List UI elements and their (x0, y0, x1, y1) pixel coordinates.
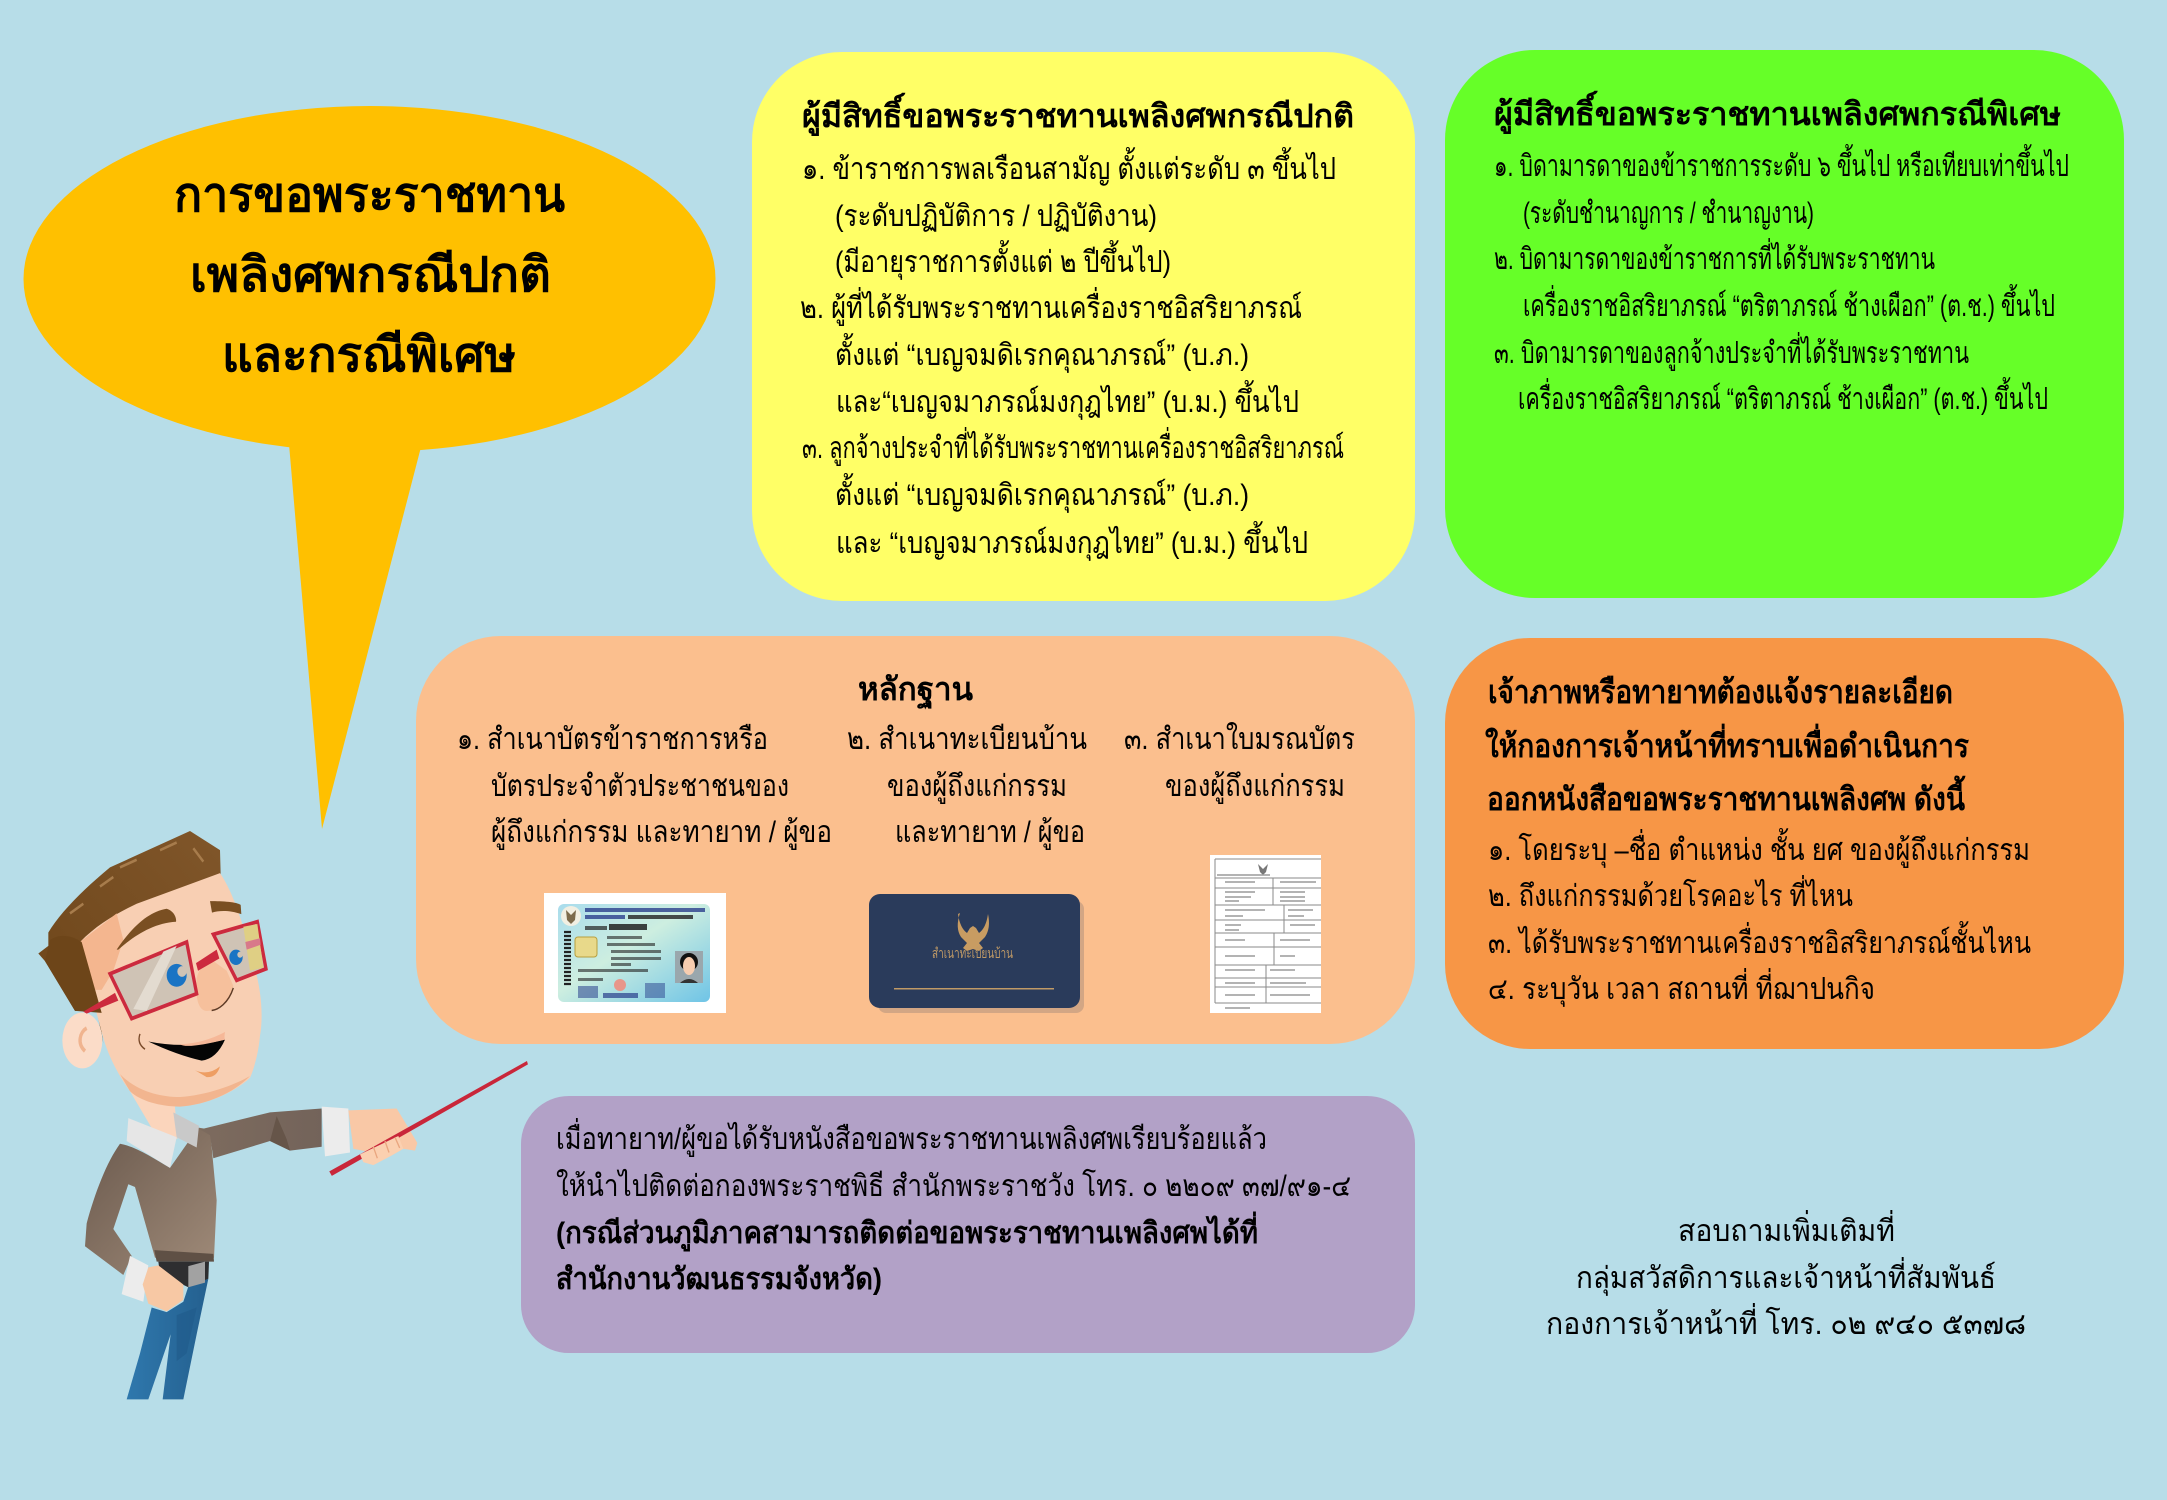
list: normal case: ๑. ข้าราชการพลเรือนสามัญ ตั้งแต่ระดับ ๓ ขึ้นไป (802, 147, 1336, 186)
heading: notification: เจ้าภาพหรือทายาทต้องแจ้งรายละเอียด (1488, 674, 1953, 710)
title (174, 169, 565, 382)
speech bubble with title (24, 106, 716, 829)
list: notification items: ๒. ถึงแก่กรรมด้วยโรคอะไร ที่ไหน (1488, 875, 1853, 913)
list: normal case: และ “เบญจมาภรณ์มงกุฎไทย” (บ.ม.) ขึ้นไป (836, 521, 1308, 562)
icon: ID card (544, 893, 726, 1013)
heading: notification (1485, 674, 1969, 817)
cover label: สำเนาทะเบียนบ้าน (932, 945, 1013, 961)
evidence item 1: บัตรประจำตัวประชาชนของ (491, 770, 789, 803)
title: การขอพระราชทาน (174, 169, 565, 222)
heading: notification: ให้กองการเจ้าหน้าที่ทราบเพื่อดำเนินการ (1485, 723, 1969, 764)
next steps text: เมื่อทายาท/ผู้ขอได้รับหนังสือขอพระราชทานเพลิงศพเรียบร้อยแล้ว (556, 1118, 1267, 1157)
contact information: กองการเจ้าหน้าที่ โทร. ๐๒ ๙๔๐ ๕๓๗๘ (1546, 1303, 2026, 1341)
title: เพลิงศพกรณีปกติ (190, 249, 551, 302)
list: normal case: และ“เบญจมาภรณ์มงกุฎไทย” (บ.ม.) ขึ้นไป (836, 380, 1299, 421)
evidence item 1: ผู้ถึงแก่กรรม และทายาท / ผู้ขอ (491, 816, 832, 850)
icon: garuda emblem (958, 913, 989, 951)
panel: normal case eligibility (752, 52, 1415, 601)
list: notification items: ๔. ระบุวัน เวลา สถานที่ ที่ฌาปนกิจ (1488, 968, 1875, 1008)
contact information: สอบถามเพิ่มเติมที่ (1678, 1210, 1895, 1248)
panel: evidence documents (416, 636, 1415, 1044)
title: และกรณีพิเศษ (222, 329, 516, 382)
next steps text: ให้นำไปติดต่อกองพระราชพิธี สำนักพระราชวัง โทร. ๐ ๒๒๐๙ ๓๗/๙๑-๔ (556, 1168, 1351, 1203)
heading: special case: ผู้มีสิทธิ์ขอพระราชทานเพลิงศพกรณีพิเศษ (1494, 90, 2061, 135)
heading: evidence: หลักฐาน (858, 671, 973, 710)
list: normal case: ตั้งแต่ “เบญจมดิเรกคุณาภรณ์” (บ.ภ.) (835, 473, 1249, 514)
evidence item 2: และทายาท / ผู้ขอ (895, 816, 1085, 850)
list: normal case: ๒. ผู้ที่ได้รับพระราชทานเครื่องราชอิสริยาภรณ์ (800, 287, 1302, 326)
illustration: presenter with pointer (38, 831, 527, 1399)
next steps text: (กรณีส่วนภูมิภาคสามารถติดต่อขอพระราชทานเพลิงศพได้ที่ (556, 1211, 1258, 1252)
list: normal case: ตั้งแต่ “เบญจมดิเรกคุณาภรณ์” (บ.ภ.) (835, 333, 1249, 374)
evidence item 2: ของผู้ถึงแก่กรรม (887, 770, 1067, 804)
list: normal case (800, 147, 1344, 562)
evidence item 2: ๒. สำเนาทะเบียนบ้าน (847, 723, 1087, 756)
list: notification items: ๑. โดยระบุ –ชื่อ ตำแหน่ง ชั้น ยศ ของผู้ถึงแก่กรรม (1488, 828, 2030, 869)
heading: normal case: ผู้มีสิทธิ์ขอพระราชทานเพลิงศพกรณีปกติ (802, 92, 1354, 137)
next steps text (556, 1118, 1351, 1296)
list: special case (1494, 144, 2069, 416)
evidence item 2 (847, 723, 1087, 850)
icon: death certificate (1210, 855, 1321, 1013)
list: normal case: (ระดับปฏิบัติการ / ปฏิบัติงาน) (835, 200, 1157, 233)
evidence item 3: ของผู้ถึงแก่กรรม (1165, 770, 1345, 804)
evidence item 1 (457, 723, 832, 850)
list: special case: ๓. บิดามารดาของลูกจ้างประจำที่ได้รับพระราชทาน (1494, 332, 1969, 371)
next steps text: สำนักงานวัฒนธรรมจังหวัด) (556, 1263, 882, 1296)
contact information (1546, 1210, 2026, 1341)
evidence item 1: ๑. สำเนาบัตรข้าราชการหรือ (457, 723, 768, 756)
heading: notification: ออกหนังสือขอพระราชทานเพลิงศพ ดังนี้ (1487, 775, 1966, 817)
evidence item 3 (1124, 722, 1355, 804)
list: normal case: ๓. ลูกจ้างประจำที่ได้รับพระราชทานเครื่องราชอิสริยาภรณ์ (802, 427, 1344, 466)
list: normal case: (มีอายุราชการตั้งแต่ ๒ ปีขึ้นไป) (835, 240, 1171, 281)
contact information: กลุ่มสวัสดิการและเจ้าหน้าที่สัมพันธ์ (1576, 1257, 1996, 1297)
evidence item 3: ๓. สำเนาใบมรณบัตร (1124, 722, 1355, 756)
icon: house registration book (869, 894, 1084, 1013)
list: notification items (1488, 828, 2031, 1008)
panel: special case eligibility (1445, 50, 2124, 598)
panel: notification details (1445, 638, 2124, 1049)
panel: next steps (521, 1096, 1415, 1353)
list: special case: ๒. บิดามารดาของข้าราชการที่ได้รับพระราชทาน (1494, 238, 1935, 276)
list: special case: (ระดับชำนาญการ / ชำนาญงาน) (1523, 197, 1814, 230)
list: notification items: ๓. ได้รับพระราชทานเครื่องราชอิสริยาภรณ์ชั้นไหน (1488, 921, 2031, 960)
